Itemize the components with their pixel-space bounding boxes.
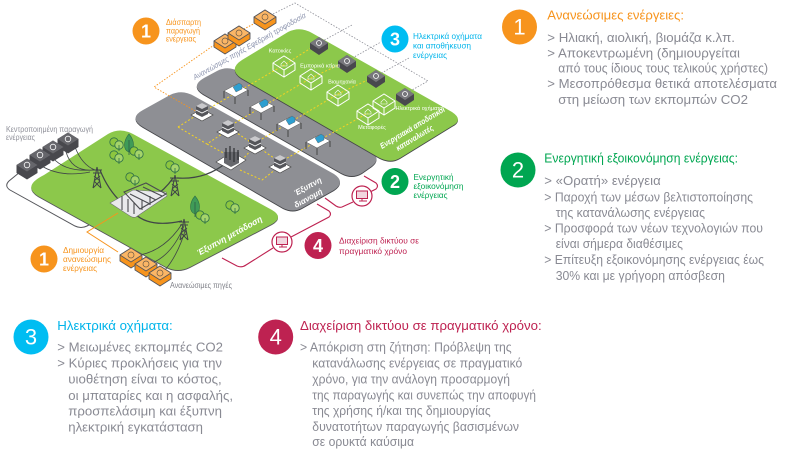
icon: transformer — [216, 146, 246, 170]
panel: electric vehicles text — [14, 318, 233, 435]
icons: renewable blocks upper — [214, 10, 276, 54]
callout: distributed generation: 1 — [141, 22, 151, 42]
label: renewable sources: Ανανεώσιμες πηγές — [170, 280, 232, 290]
badge 4: 4 — [270, 324, 282, 350]
badge 1: 1 — [513, 14, 526, 40]
orange connector — [87, 213, 118, 252]
icon: monitor upper — [352, 186, 372, 206]
list: real-time management points: > Απόκριση στη ζήτηση: Πρόβλεψη της — [300, 340, 512, 355]
list: renewable energy points: > Μεσοπρόθεσμα θετικά αποτελέσματα — [547, 76, 778, 91]
list: energy saving points: > Επίτευξη εξοικονόμησης ενέργειας έως — [544, 252, 764, 267]
callout: electric vehicles and storage: Ηλεκτρικά οχήματα — [413, 31, 482, 41]
list: renewable energy points: > Αποκεντρωμένη (δημιουργείται — [547, 46, 740, 60]
list: real-time management points: της παραγωγής και συνεπώς την αποφυγή — [312, 387, 536, 402]
callout: renewable creation: 1 — [39, 250, 49, 270]
list: electric vehicle points: > Κύριες προκλήσεις για την — [57, 356, 222, 371]
panel: real-time management text — [258, 318, 542, 449]
badge 1 — [502, 10, 537, 44]
icons: buildings on distribution platform — [191, 103, 291, 173]
icons: office desks — [224, 83, 330, 155]
callout: renewable creation: ενέργειας — [63, 263, 97, 273]
icons: pylons — [92, 167, 189, 240]
consumer labels: Κατοικίες — [269, 48, 292, 54]
label: smart distribution: διανομή — [293, 187, 324, 210]
consumer labels: Εμπορικά κτίρια — [300, 62, 341, 70]
panel: efficient consumers platform — [235, 29, 458, 162]
list: electric vehicle points — [57, 340, 233, 435]
callout: electric vehicles and storage — [382, 26, 482, 60]
list: electric vehicle points: > Μειωμένες εκπομπές CO2 — [57, 340, 223, 355]
list: renewable energy points — [547, 30, 778, 107]
callout: renewable creation: ανανεώσιμης — [63, 254, 111, 264]
callout: centralized generation: ενέργειας — [6, 132, 35, 142]
panel: renewable energy text — [502, 8, 778, 107]
trees — [110, 134, 239, 224]
label: smart distribution: Έξυπνη — [293, 175, 323, 198]
label: smart transmission: Έξυπνη μετάδοση — [195, 214, 264, 258]
callout: centralized generation: Κεντροποιημένη παραγωγή — [6, 124, 93, 134]
callout: renewable creation — [30, 245, 111, 273]
crimson network connector lines — [222, 176, 378, 267]
consumer labels: Βιομηχανία — [328, 80, 357, 86]
label: smart distribution — [293, 175, 324, 210]
list: renewable energy points: στη μείωση των εκπομπών CO2 — [558, 92, 748, 107]
label: efficient consumers: Ενεργειακά αποδοτικοί — [378, 105, 447, 151]
consumer labels: Μεταφορές — [358, 124, 386, 131]
white outline path behind central generation — [7, 172, 118, 228]
list: electric vehicle points: ηλεκτρική εγκατάσταση — [68, 420, 203, 435]
consumer labels — [269, 48, 443, 131]
heading: real-time management: Διαχείριση δικτύου σε πραγματικό χρόνο: — [300, 318, 542, 333]
callout: renewable creation: Δημιουργία — [63, 245, 104, 255]
callout: distributed generation: παραγωγή — [166, 26, 200, 36]
icons: central generation blocks — [16, 132, 78, 180]
callout: electric vehicles and storage: και αποθήκευση — [413, 40, 471, 50]
list: electric vehicle points: υιοθέτηση είναι το κόστος, — [68, 372, 222, 387]
icons: white consumer cubes — [273, 56, 395, 125]
list: renewable energy points: > Ηλιακή, αιολική, βιομάζα κ.λπ. — [547, 30, 735, 45]
heading: energy saving: Ενεργητική εξοικονόμηση ενέργειας: — [544, 151, 738, 166]
callout: electric vehicles and storage: 3 — [390, 30, 400, 50]
panel: energy saving text — [500, 151, 764, 283]
rotated renewable supply label: Ανανεώσιμες πηγές Εφεδρική τροφοδοσία — [191, 11, 308, 82]
panel: middle grey platform — [197, 68, 377, 177]
list: renewable energy points: από τους ίδιους τους τελικούς χρήστες) — [558, 61, 768, 76]
badge 3 — [14, 320, 48, 354]
list: energy saving points: > Προσφορά των νέων τεχνολογιών που — [544, 220, 763, 236]
power lines — [40, 147, 226, 270]
icons: dark storage blocks — [310, 37, 414, 106]
callout: electric vehicles and storage: ενέργειας — [413, 50, 447, 60]
callout: real-time network management: Διαχείριση δικτύου σε — [339, 236, 419, 246]
icons: renewable blocks lower — [120, 248, 171, 286]
icon: monitor lower — [272, 232, 292, 252]
list: real-time management points: χρόνο, για την ανάλογη προσαρμογή — [312, 371, 510, 386]
list: energy saving points: της κατανάλωσης ενέργειας — [556, 205, 705, 220]
list: energy saving points — [544, 173, 764, 283]
callout: energy saving: εξοικονόμηση — [414, 181, 464, 191]
list: real-time management points — [300, 340, 536, 449]
list: real-time management points: της χρήσης ή/και της δημιουργίας — [312, 403, 491, 418]
list: real-time management points: σε ορυκτά καύσιμα — [312, 434, 415, 449]
panel: smart distribution platform — [136, 92, 340, 212]
heading: renewable energy: Ανανεώσιμες ενέργειες: — [547, 8, 684, 22]
panel: smart transmission platform — [31, 130, 278, 271]
badge 2 — [500, 152, 536, 188]
callout: distributed generation — [132, 17, 201, 44]
list: electric vehicle points: προσπελάσιμη και έξυπνη — [68, 404, 222, 419]
callout: energy saving: Ενεργητική — [414, 172, 454, 182]
callout: real-time network management: 4 — [313, 236, 323, 256]
callout: real-time network management: πραγματικό χρόνο — [339, 246, 407, 256]
list: real-time management points: κατανάλωσης ενέργειας σε πραγματικό — [312, 355, 522, 370]
list: electric vehicle points: οι μπαταρίες και η ασφαλής, — [68, 388, 233, 403]
consumer labels: Ηλεκτρικά οχήματα — [395, 105, 443, 112]
list: energy saving points: > Παροχή των μέσων βελτιστοποίησης — [544, 190, 753, 205]
badge 3: 3 — [25, 324, 37, 350]
list: energy saving points: είναι σήμερα διαθέσιμες — [556, 236, 683, 251]
heading: electric vehicles: Ηλεκτρικά οχήματα: — [57, 318, 173, 333]
callout: real-time network management — [304, 232, 419, 259]
badge 4 — [258, 320, 293, 354]
list: energy saving points: 30% και με γρήγορη απόσβεση — [556, 268, 725, 283]
callout: energy saving: ενέργειας — [414, 190, 448, 200]
callout: energy saving — [382, 168, 464, 200]
callout: energy saving: 2 — [390, 172, 400, 192]
callout: distributed generation: ενέργειας — [166, 34, 196, 44]
grid connection lines — [154, 3, 428, 180]
label: efficient consumers: καταναλωτές — [394, 123, 436, 153]
callout: centralized generation — [6, 124, 93, 142]
icon: substation — [110, 183, 167, 217]
callout: distributed generation: Διάσπαρτη — [166, 17, 201, 27]
badge 2: 2 — [512, 158, 524, 182]
list: real-time management points: δυνατοτήτων παραγωγής βασισμένων — [312, 419, 519, 434]
list: energy saving points: > «Ορατή» ενέργεια — [544, 173, 661, 188]
